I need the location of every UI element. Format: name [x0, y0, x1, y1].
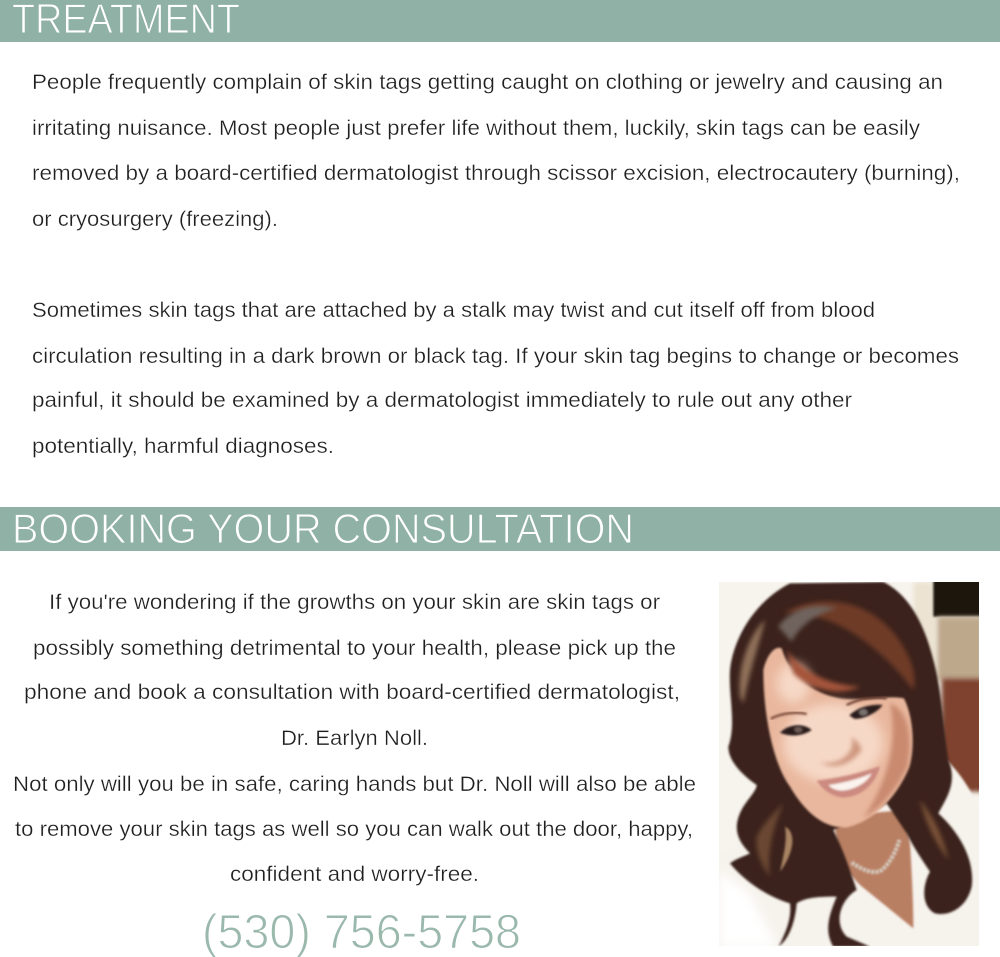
- heading band: treatment: [0, 0, 1000, 42]
- eye left: [771, 713, 812, 735]
- text block: treatment paragraph 1: irritating nuisance. Most people just prefer life without them, luckily, skin tags can be easily: [32, 117, 921, 140]
- heading band: booking your consultation: [0, 505, 1000, 552]
- cheek shading: [863, 703, 910, 818]
- text block: treatment paragraph 2: potentially, harmful diagnoses.: [32, 435, 334, 458]
- text block: booking paragraph: Not only will you be in safe, caring hands but Dr. Noll will also be able: [13, 773, 696, 796]
- text block: booking paragraph: to remove your skin tags as well so you can walk out the door, happy,: [15, 818, 693, 841]
- face: [763, 648, 913, 827]
- text block: treatment paragraph 2: painful, it should be examined by a dermatologist immediately to rule out any other: [32, 389, 852, 412]
- nose: [820, 737, 862, 766]
- text block: treatment paragraph 2: circulation resulting in a dark brown or black tag. If your skin tag begins to change or becomes: [32, 345, 959, 368]
- hair highlights: [783, 601, 914, 690]
- text block: booking paragraph: [13, 591, 696, 886]
- jacket: [947, 760, 972, 796]
- text block: treatment paragraph 1: or cryosurgery (freezing).: [32, 208, 278, 231]
- text block: treatment paragraph 2: Sometimes skin tags that are attached by a stalk may twist and cut itself off from blood: [32, 299, 875, 322]
- eye right: [847, 698, 887, 719]
- mouth: [817, 766, 880, 797]
- text block: booking paragraph: If you're wondering if the growths on your skin are skin tags or: [49, 591, 660, 614]
- necklace: [852, 840, 899, 872]
- text block: treatment paragraph 2: [32, 299, 959, 458]
- text block: booking paragraph: Dr. Earlyn Noll.: [281, 727, 428, 750]
- text block: booking paragraph: phone and book a consultation with board-certified dermatologist,: [24, 681, 680, 704]
- text block: treatment paragraph 1: People frequently complain of skin tags getting caught on clothing or jewelry and causing an: [32, 71, 943, 94]
- face highlight: [783, 703, 883, 783]
- hair back: [728, 582, 972, 947]
- text block: booking paragraph: possibly something detrimental to your health, please pick up the: [33, 637, 676, 660]
- text block: treatment paragraph 1: removed by a board-certified dermatologist through scissor excision, electrocautery (burning),: [32, 162, 960, 185]
- text block: treatment paragraph 1: [32, 71, 960, 231]
- white fade at lower left: [719, 870, 778, 948]
- portrait photo illustration: [719, 580, 983, 948]
- text block: booking paragraph: confident and worry-free.: [230, 863, 479, 886]
- heading band: booking your consultation: BOOKING YOUR CONSULTATION: [12, 505, 634, 552]
- neck and chest: [833, 810, 913, 928]
